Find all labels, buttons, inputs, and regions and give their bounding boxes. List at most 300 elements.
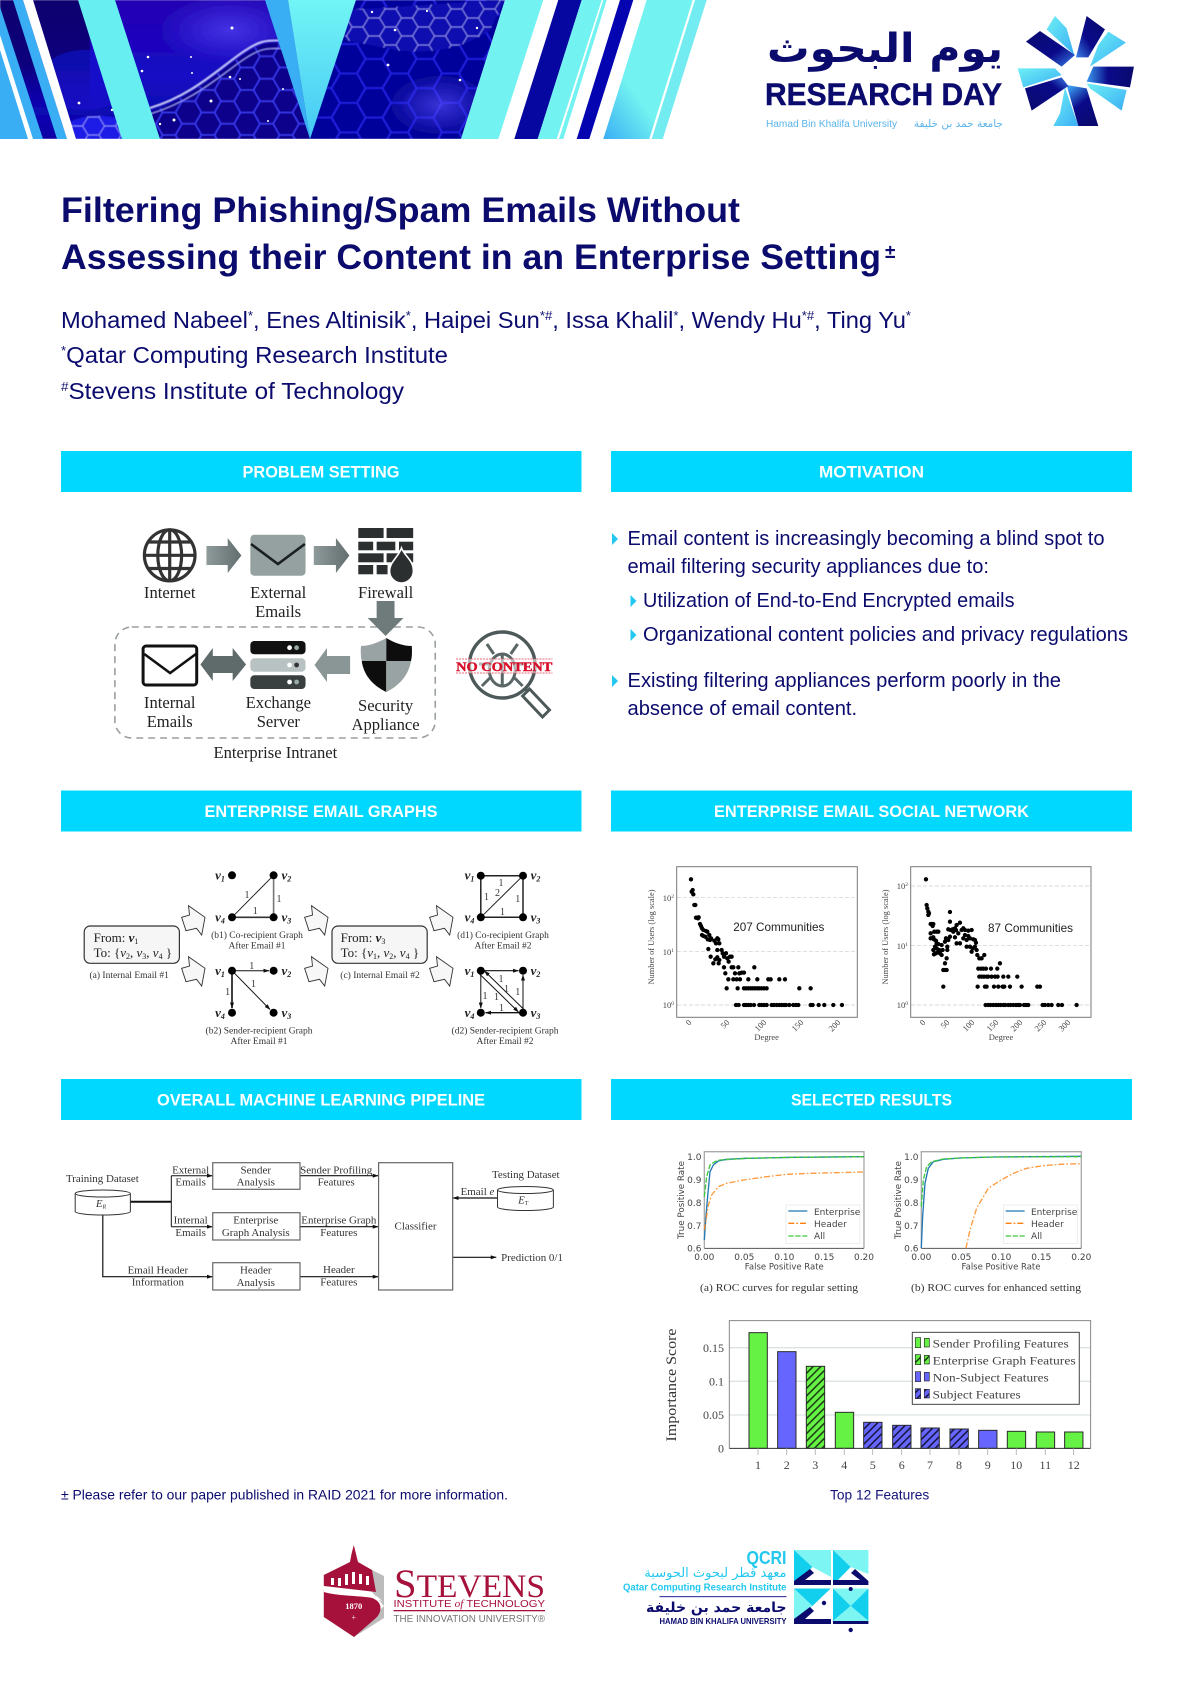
ROC chart: enhanced setting <box>894 1152 1092 1294</box>
bar chart: top 12 features: 12 <box>1068 1458 1080 1472</box>
university line: جامعة حمد بن خليفة <box>914 118 1003 130</box>
authors and affiliations: Stevens Institute of Technology <box>68 378 404 404</box>
scatter chart: 87 communities: Degree <box>989 1032 1013 1042</box>
graph b1: 1 <box>253 906 258 917</box>
bar chart: top 12 features: Non-Subject Features <box>933 1370 1049 1384</box>
ROC chart: regular setting: 0.15 <box>814 1253 834 1263</box>
ROC chart: regular setting: 0.7 <box>687 1222 702 1232</box>
heading: selected results <box>611 1079 1132 1120</box>
graph d2: 2 <box>535 970 540 979</box>
graph d1: 1 <box>484 892 489 903</box>
ROC chart: enhanced setting: Enterprise <box>1031 1208 1078 1218</box>
heading: motivation: MOTIVATION <box>819 464 924 482</box>
email box c <box>332 926 427 981</box>
graph b2: v <box>215 1005 221 1020</box>
arrow: external emails to firewall <box>314 538 349 573</box>
ROC chart: enhanced setting: (b) ROC curves for enhanced setting <box>911 1282 1082 1294</box>
label: Exchange Server <box>246 693 311 731</box>
email box c: (c) Internal Email #2 <box>340 970 420 981</box>
edge labels: Email e <box>461 1186 494 1198</box>
edge labels: Sender Profiling <box>300 1164 373 1177</box>
graph b2: 1 <box>249 961 254 972</box>
box: sender analysis <box>213 1163 300 1189</box>
authors and affiliations: , Issa Khalil <box>552 307 673 333</box>
authors and affiliations: # <box>61 379 69 394</box>
email box c: v <box>384 945 390 960</box>
edge labels: Email Header <box>128 1264 188 1277</box>
panel: enterprise email graphs <box>61 790 582 1047</box>
Arabic wordmark: يوم البحوث <box>767 26 1003 72</box>
database: testing dataset: Testing Dataset <box>492 1169 560 1181</box>
logo: Research Day <box>765 16 1134 130</box>
email box a <box>84 926 179 981</box>
ROC chart: regular setting: 0.9 <box>687 1176 702 1186</box>
bar chart: top 12 features: 3 <box>812 1458 818 1472</box>
edge labels: Header <box>323 1264 355 1276</box>
graph d2: (d2) Sender-recipient Graph <box>452 1026 559 1036</box>
heading: pipeline <box>61 1079 582 1120</box>
scatter chart: 87 communities: Number of Users (log scale) <box>880 889 890 984</box>
edge labels: Prediction 0/1 <box>501 1252 563 1264</box>
ROC chart: regular setting: 0.00 <box>694 1253 715 1263</box>
scatter chart: 87 communities: 1 <box>905 942 908 948</box>
authors and affiliations: , Enes Altinisik <box>253 307 406 333</box>
authors and affiliations: * <box>673 308 678 323</box>
bullet: blind spot <box>612 528 1104 578</box>
edge labels: Emails <box>175 1176 206 1189</box>
graph b1: v <box>282 868 287 882</box>
bullet list <box>612 528 1128 720</box>
database: training dataset: Training Dataset <box>66 1173 139 1185</box>
intranet boundary <box>115 627 435 738</box>
tagline: The Innovation University: THE INNOVATION UNIVERSITY® <box>394 1614 546 1625</box>
panel: enterprise email social network <box>611 790 1132 1042</box>
graph b2: 3 <box>286 1012 291 1021</box>
scatter chart: 207 communities: 10 <box>663 1000 671 1010</box>
icon: internal email <box>143 646 197 685</box>
ROC chart: enhanced setting: 0.05 <box>951 1253 971 1263</box>
scatter chart: 87 communities: 300 <box>1056 1017 1072 1033</box>
graph b2: v <box>282 1005 287 1020</box>
email box a: 3 <box>142 952 146 961</box>
footnote: ± Please refer to our paper published in RAID 2021 for more information. <box>61 1486 508 1502</box>
authors and affiliations: Qatar Computing Research Institute <box>66 342 448 368</box>
scatter chart: 207 communities: 0 <box>683 1017 693 1027</box>
scatter chart: 87 communities: 0 <box>905 1001 908 1007</box>
graph d2: v <box>465 1005 470 1020</box>
graph d1: 1 <box>515 894 520 905</box>
scatter chart: 87 communities: 200 <box>1008 1017 1024 1033</box>
ROC chart: regular setting: 0.8 <box>687 1199 702 1209</box>
icon: Stevens shield: 1870 <box>345 1601 362 1611</box>
ROC chart: enhanced setting: All <box>1031 1232 1042 1242</box>
scatter chart: 87 communities: 0 <box>917 1017 927 1027</box>
Arabic institute name: معهد قطر لبحوث الحوسبة <box>644 1566 786 1581</box>
scatter chart: 207 communities: 50 <box>718 1017 731 1030</box>
graph b1: v <box>215 868 221 882</box>
label: Security Appliance <box>352 696 420 734</box>
English wordmark: RESEARCH DAY <box>765 76 1002 112</box>
graph d2: 3 <box>535 1012 540 1021</box>
heading: enterprise email graphs: ENTERPRISE EMAIL GRAPHS <box>204 803 438 821</box>
graph b2: 2 <box>286 970 291 979</box>
graph b2: 1 <box>225 987 230 998</box>
email box a: 2 <box>126 952 130 961</box>
scatter chart: 207 communities: 207 Communities <box>733 920 824 934</box>
ROC chart: regular setting: Enterprise <box>814 1208 861 1218</box>
bar chart: top 12 features: Enterprise Graph Features <box>933 1354 1076 1368</box>
heading: pipeline: OVERALL MACHINE LEARNING PIPELINE <box>157 1092 485 1110</box>
graph d1: 1 <box>498 878 504 889</box>
graph d2: v <box>531 1005 536 1020</box>
email box c: From: v <box>341 930 381 945</box>
wordmark: Stevens: STEVENS <box>394 1561 545 1606</box>
box: enterprise graph analysis: Enterprise <box>233 1214 278 1227</box>
graph b1: 4 <box>220 916 225 926</box>
database: training dataset: R <box>102 1204 107 1211</box>
email box c: 2 <box>389 952 393 961</box>
bar chart: top 12 features: Importance Score <box>664 1328 680 1442</box>
graph d2: v <box>531 963 536 978</box>
scatter chart: 207 communities: 0 <box>671 1001 674 1007</box>
scatter chart: 207 communities: 100 <box>752 1017 768 1033</box>
title: Filtering Phishing/Spam Emails Without <box>61 190 740 230</box>
title: ± <box>885 242 895 263</box>
bar chart: top 12 features: 6 <box>899 1458 905 1472</box>
email box c: , <box>393 945 400 960</box>
ROC chart: regular setting: False Positive Rate <box>745 1262 824 1272</box>
university line <box>766 118 1003 130</box>
graph b1: (b1) Co-recipient Graph <box>211 930 303 941</box>
box: sender analysis: Sender <box>241 1164 271 1177</box>
graph b2: 1 <box>221 970 225 979</box>
email box a: 4 <box>159 952 163 961</box>
icon: star logo <box>1018 16 1134 126</box>
icon: bug under magnifier with no content stamp <box>456 632 553 717</box>
ROC chart: regular setting: 1.0 <box>687 1153 702 1163</box>
bar chart: top 12 features: 9 <box>985 1458 991 1472</box>
ROC chart: enhanced setting: 0.8 <box>904 1199 919 1209</box>
scatter chart: 87 communities: 250 <box>1032 1017 1048 1033</box>
label: Exchange Server: Exchange <box>246 693 311 712</box>
graph d2: 1 <box>482 991 488 1002</box>
title: Assessing their Content in an Enterprise Setting <box>61 237 881 277</box>
heading: social network: ENTERPRISE EMAIL SOCIAL NETWORK <box>714 803 1029 821</box>
authors and affiliations: *# <box>540 308 553 323</box>
graph d1: 2 <box>535 874 540 884</box>
scatter chart: 207 communities: 1 <box>671 948 674 954</box>
box: header analysis <box>213 1263 300 1290</box>
authors and affiliations: * <box>248 308 253 323</box>
scatter chart: 87 communities: 150 <box>984 1017 1000 1033</box>
email box c: } <box>410 945 419 960</box>
panel: motivation <box>611 451 1132 720</box>
graph b2: 1 <box>251 979 256 990</box>
ROC chart: enhanced setting: 1.0 <box>904 1153 919 1163</box>
email box a: From: v <box>94 930 134 945</box>
authors and affiliations: , Ting Yu <box>814 307 906 333</box>
scatter chart: 207 communities: 150 <box>789 1017 805 1033</box>
graph b2: v <box>215 963 221 978</box>
tagline: Institute of Technology: INSTITUTE of TECHNOLOGY <box>394 1598 545 1610</box>
label: Internet: Internet <box>144 583 196 602</box>
database: testing dataset: T <box>525 1201 529 1207</box>
graph d1: v <box>465 910 470 924</box>
graph d1: 1 <box>470 874 474 884</box>
database: testing dataset: E <box>518 1194 525 1207</box>
graph b2: After Email #1 <box>231 1036 288 1047</box>
Arabic university name: جامعة حمد بن خليفة <box>646 1600 786 1616</box>
bullet: existing appliances: absence of email content. <box>628 698 857 720</box>
connectors <box>103 1176 498 1277</box>
English institute name: Qatar Computing Research Institute <box>623 1582 787 1594</box>
email box c: v <box>400 945 406 960</box>
graph b1: After Email #1 <box>229 940 286 952</box>
graph d2: 1 <box>470 970 474 979</box>
scatter chart: 87 communities: 10 <box>897 941 905 951</box>
arrow: security appliance to server <box>314 648 350 682</box>
email box c: 3 <box>381 937 385 946</box>
ROC chart: regular setting <box>677 1152 874 1294</box>
logo: QCRI and Hamad Bin Khalifa University <box>623 1548 868 1632</box>
pipeline diagram <box>66 1163 563 1290</box>
edge labels: External <box>172 1164 209 1177</box>
scatter chart: 87 communities: 50 <box>938 1017 951 1030</box>
English university name: HAMAD BIN KHALIFA UNIVERSITY <box>660 1616 787 1626</box>
icon: bug under magnifier with no content stamp: NO CONTENT <box>456 659 553 674</box>
scatter chart: 87 communities: 10 <box>897 1000 905 1010</box>
bar chart: top 12 features: 10 <box>1010 1458 1022 1472</box>
authors and affiliations: *# <box>802 308 815 323</box>
graph d2 <box>452 963 559 1047</box>
graph d2: 1 <box>494 992 499 1003</box>
edge labels: Internal <box>174 1214 208 1227</box>
bar chart: top 12 features: Subject Features <box>933 1388 1021 1402</box>
database: testing dataset <box>492 1169 560 1211</box>
ROC chart: enhanced setting: 0.6 <box>904 1244 919 1254</box>
ROC chart: regular setting: True Positive Rate <box>677 1161 687 1240</box>
university line: Hamad Bin Khalifa University <box>766 119 897 130</box>
graph b1: 2 <box>286 874 291 884</box>
box: enterprise graph analysis <box>213 1213 300 1240</box>
icon: QCRI mark <box>794 1550 868 1632</box>
ROC chart: regular setting: Header <box>814 1220 847 1230</box>
heading: selected results: SELECTED RESULTS <box>791 1092 952 1110</box>
heading: enterprise email graphs <box>61 790 582 832</box>
ROC chart: enhanced setting: 0.00 <box>911 1253 932 1263</box>
label: Exchange Server: Server <box>257 712 300 731</box>
authors and affiliations: Mohamed Nabeel <box>61 307 246 333</box>
edge labels: Features <box>320 1227 357 1239</box>
bar chart: top 12 features: 2 <box>784 1458 790 1472</box>
scatter chart: 87 communities: 10 <box>897 881 905 891</box>
graph b2: v <box>282 963 287 978</box>
email box a: (a) Internal Email #1 <box>89 970 169 981</box>
banner <box>0 0 707 139</box>
graph d1: v <box>531 910 536 924</box>
box: sender analysis: Analysis <box>237 1176 275 1189</box>
ROC chart: regular setting: (a) ROC curves for regular setting <box>700 1282 859 1294</box>
authors and affiliations: * <box>61 343 66 358</box>
graph d1: 3 <box>535 916 540 926</box>
icon: security shield <box>361 638 412 692</box>
graph b1: 1 <box>276 894 282 905</box>
email box a: v <box>137 945 143 960</box>
bar chart: top 12 features: 0 <box>718 1442 724 1456</box>
panel: problem setting <box>61 451 582 762</box>
label: External Emails <box>250 583 307 621</box>
graph b2 <box>206 961 313 1047</box>
scatter chart: 87 communities: 87 Communities <box>988 921 1073 935</box>
graph b1: v <box>215 910 221 924</box>
bar chart: top 12 features: 0.15 <box>703 1341 724 1355</box>
authors and affiliations <box>61 307 911 404</box>
graph d2: 1 <box>498 974 504 985</box>
graph d2: v <box>465 963 470 978</box>
bullet: existing appliances <box>612 670 1061 720</box>
edge labels: Information <box>132 1276 185 1289</box>
icon: exchange server <box>250 641 306 689</box>
bar chart: top 12 features: 8 <box>956 1458 962 1472</box>
bar chart: top 12 features <box>664 1321 1091 1502</box>
graph b1 <box>211 868 303 952</box>
label: Security Appliance: Security <box>358 696 414 715</box>
ROC chart: enhanced setting: Header <box>1031 1220 1064 1230</box>
bullet: blind spot: email filtering security appliances due to: <box>628 556 989 578</box>
ROC chart: regular setting: All <box>814 1232 825 1242</box>
bullet: blind spot: Email content is increasingly becoming a blind spot to <box>628 528 1104 550</box>
label: Internal Emails: Internal <box>144 693 196 712</box>
graph d1 <box>457 868 549 952</box>
label: External Emails: External <box>250 583 307 602</box>
heading: social network <box>611 790 1132 832</box>
authors and affiliations: * <box>906 308 911 323</box>
scatter chart: 207 communities: 200 <box>826 1017 842 1033</box>
icon: Stevens shield <box>324 1545 384 1637</box>
graph b1: 1 <box>244 890 250 901</box>
email box c: 4 <box>406 952 410 961</box>
label: Firewall: Firewall <box>358 583 414 602</box>
heading: problem setting: PROBLEM SETTING <box>242 464 400 482</box>
graph d2: 4 <box>469 1012 474 1021</box>
bar chart: top 12 features: 5 <box>870 1458 876 1472</box>
email box a: } <box>163 945 172 960</box>
email box a: v <box>153 945 159 960</box>
email box c: 1 <box>373 952 377 961</box>
bar chart: top 12 features: Top 12 Features <box>830 1486 929 1502</box>
label: Internal Emails: Emails <box>147 712 193 731</box>
logo: Stevens Institute of Technology <box>324 1545 546 1637</box>
graph b2: 4 <box>220 1012 225 1021</box>
ROC chart: regular setting: 0.05 <box>734 1253 754 1263</box>
graph d1: After Email #2 <box>475 940 532 952</box>
heading: problem setting <box>61 451 582 492</box>
sub-bullet: encrypted emails: Utilization of End-to-End Encrypted emails <box>643 590 1014 612</box>
email box a: , <box>130 945 137 960</box>
box: classifier <box>379 1163 453 1290</box>
icon: external email <box>250 535 306 576</box>
ROC chart: enhanced setting: 0.9 <box>904 1176 919 1186</box>
email box a: , <box>146 945 153 960</box>
box: header analysis: Header <box>240 1264 272 1277</box>
graph d1: v <box>465 868 470 882</box>
scatter chart: 87 communities: 2 <box>905 882 908 888</box>
scatter chart: 207 communities: Degree <box>754 1032 779 1042</box>
graph d2: 1 <box>515 987 520 998</box>
label: Enterprise Intranet: Enterprise Intranet <box>213 743 338 762</box>
authors and affiliations: , Wendy Hu <box>678 307 802 333</box>
icon: firewall <box>358 528 413 583</box>
email box c: To: {v <box>341 945 373 960</box>
ROC chart: enhanced setting: False Positive Rate <box>962 1262 1041 1272</box>
wordmark: QCRI: QCRI <box>746 1548 786 1568</box>
graph b1: 1 <box>221 874 225 884</box>
ROC chart: enhanced setting: 0.20 <box>1071 1253 1092 1263</box>
label: Internal Emails <box>144 693 196 731</box>
graph d1: (d1) Co-recipient Graph <box>457 930 549 941</box>
graph d1: 2 <box>495 888 500 899</box>
box: header analysis: Analysis <box>237 1277 275 1289</box>
ROC chart: enhanced setting: 0.10 <box>991 1253 1012 1263</box>
ROC chart: enhanced setting: 0.7 <box>904 1222 918 1232</box>
ROC chart: regular setting: 0.6 <box>687 1244 702 1254</box>
scatter chart: 207 communities: Number of Users (log scale) <box>646 889 656 984</box>
bar chart: top 12 features: 4 <box>841 1458 847 1472</box>
graph d2: 1 <box>504 984 509 995</box>
bar chart: top 12 features: 0.1 <box>709 1374 724 1388</box>
label: External Emails: Emails <box>255 602 301 621</box>
bar chart: top 12 features: 1 <box>755 1458 761 1472</box>
graph b1: v <box>282 910 287 924</box>
bar chart: top 12 features: 11 <box>1040 1458 1051 1472</box>
panel: selected results <box>611 1079 1132 1502</box>
graph b1: 3 <box>286 916 291 926</box>
scatter chart: 207 communities: 2 <box>671 894 674 900</box>
box: enterprise graph analysis: Graph Analysis <box>222 1227 290 1239</box>
authors and affiliations: * <box>406 308 411 323</box>
scatter chart: 207 communities <box>646 867 857 1042</box>
ROC chart: regular setting: 0.20 <box>854 1253 874 1263</box>
bar chart: top 12 features: Sender Profiling Features <box>933 1336 1069 1350</box>
block arrows <box>182 906 453 986</box>
scatter chart: 207 communities: 10 <box>663 947 671 957</box>
ROC chart: enhanced setting: True Positive Rate <box>894 1161 904 1240</box>
ROC chart: enhanced setting: 0.15 <box>1031 1253 1051 1263</box>
network diagram <box>115 528 553 762</box>
scatter chart: 87 communities <box>880 867 1091 1042</box>
graph d2: 1 <box>499 1003 504 1014</box>
bar chart: top 12 features: 7 <box>927 1458 933 1472</box>
icon: Stevens shield: + <box>352 1613 357 1622</box>
scatter chart: 87 communities: 100 <box>960 1017 976 1033</box>
edge labels <box>128 1164 563 1289</box>
edge labels: Emails <box>175 1227 206 1239</box>
graph d2: After Email #2 <box>477 1036 534 1047</box>
edge labels: Enterprise Graph <box>301 1214 377 1227</box>
icon: globe <box>144 530 195 581</box>
bullet: existing appliances: Existing filtering appliances perform poorly in the <box>628 670 1061 692</box>
panel: overall machine learning pipeline <box>61 1079 582 1290</box>
title <box>61 190 895 277</box>
graph b2: (b2) Sender-recipient Graph <box>206 1026 313 1036</box>
arrow: internet to external emails <box>206 538 241 573</box>
label: Security Appliance: Appliance <box>352 715 420 734</box>
edge labels: Features <box>318 1176 355 1189</box>
graph d1: 1 <box>500 907 505 918</box>
database: training dataset: E <box>96 1198 103 1210</box>
arrow: firewall to security appliance <box>368 601 403 636</box>
email box c: , <box>377 945 384 960</box>
